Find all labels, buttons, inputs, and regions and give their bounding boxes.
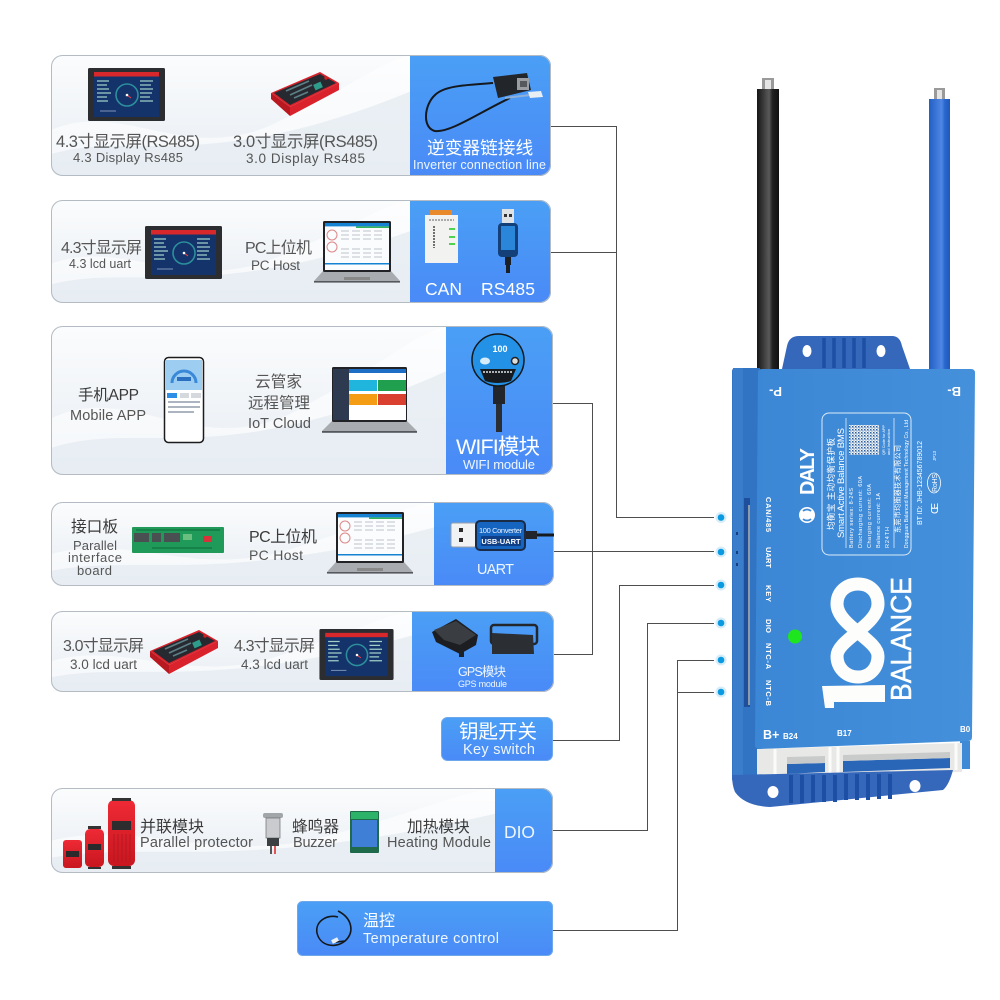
DIO label: DIO [504, 822, 535, 842]
GPS module label: GPS module [458, 679, 507, 689]
heating module label: 加热模块 [407, 818, 470, 836]
PC host label: PC上位机 [245, 239, 312, 257]
terminal labels: B17 [837, 729, 852, 738]
icon: WIFI module: 100 [492, 344, 508, 354]
product label: Dongguan Balanced Management Technology Co., Ltd [904, 420, 910, 548]
product label: QR Code for APP [882, 425, 886, 455]
4.3 inch display label: 4.3寸显示屏(RS485) [56, 132, 200, 151]
port labels: KEY [764, 585, 773, 602]
icon: 4.3 inch display [145, 226, 222, 279]
product label: Balance current: 1A [876, 493, 882, 548]
GPS module label: GPS模块 [458, 665, 506, 679]
mobile app label: 手机APP [78, 386, 139, 404]
4.3 lcd label [61, 239, 142, 271]
port labels: NTC-A [764, 643, 773, 670]
icon: heating module [350, 811, 379, 853]
icon: laptop [314, 221, 400, 283]
connectors [757, 741, 970, 777]
cloud label: 远程管理 [248, 394, 310, 412]
port labels: UART [764, 547, 773, 568]
icon: USB-UART dongle: USB-UART [481, 537, 521, 546]
connection dots [716, 512, 726, 698]
icon: USB-UART dongle [451, 520, 554, 551]
panel: GPS module [51, 611, 554, 692]
icon: 4.3 inch display [88, 68, 165, 121]
cloud label: 云管家 [255, 373, 302, 391]
terminal labels: B- [947, 384, 961, 399]
black wire P- [757, 78, 779, 370]
product label: 东莞市均衡器技术有限公司 [893, 445, 902, 533]
GPS module label [458, 665, 507, 689]
WIFI module label [456, 435, 540, 472]
buzzer label [292, 818, 339, 851]
port labels: CAN/485 [764, 497, 773, 532]
port labels [764, 497, 773, 707]
panel: WIFI module [51, 326, 553, 475]
3.0 inch display label [233, 132, 378, 166]
4.3 lcd label: 4.3 lcd uart [241, 657, 308, 672]
4.3 lcd label [234, 637, 315, 672]
mobile app label [70, 386, 146, 424]
terminal labels: B24 [783, 732, 798, 741]
BT ID and certifications [917, 441, 941, 525]
3.0 lcd label [63, 637, 144, 672]
icon: 4.3 inch display [319, 629, 394, 680]
terminal labels: B+ [763, 728, 779, 742]
panel: key switch: 钥匙开关 [459, 721, 537, 743]
BT ID and certifications: RoHS [932, 474, 939, 492]
panel: key switch [442, 718, 552, 760]
icon: 3.0 inch display [271, 72, 339, 116]
inverter cable label: 逆变器链接线 [427, 138, 533, 158]
blue wire B- [929, 88, 950, 370]
parallel protector label: 并联模块 [140, 818, 204, 836]
parallel protector label: Parallel protector [140, 835, 253, 851]
terminal labels: P- [769, 384, 782, 399]
product label: and Instruction [887, 429, 891, 455]
panel: CAN and RS485 [51, 200, 551, 303]
buzzer label: 蜂鸣器 [292, 818, 339, 836]
BT ID and certifications: CE [930, 503, 941, 514]
WIFI module label: WIFI module [463, 457, 535, 472]
3.0 inch display label: 3.0寸显示屏(RS485) [233, 132, 378, 151]
product label: Discharging current: 60A [858, 476, 864, 548]
icon: parallel interface board [132, 527, 224, 553]
4.3 lcd label: 4.3 lcd uart [69, 257, 132, 271]
parallel interface board label: interface [68, 550, 122, 565]
4.3 lcd label: 4.3寸显示屏 [234, 637, 315, 655]
mobile app label: Mobile APP [70, 408, 146, 424]
cloud label: IoT Cloud [248, 416, 311, 432]
top mounting flange [782, 336, 910, 369]
panel: inverter connection line and RS485 displays [51, 55, 551, 176]
icon: buzzer [263, 813, 283, 854]
icon: inverter cable [426, 73, 543, 131]
4.3 inch display label [56, 132, 200, 165]
panel: DIO [51, 788, 553, 873]
product label: Charging current: 60A [867, 484, 873, 548]
icon: laptop [327, 512, 413, 574]
buzzer label: Buzzer [293, 835, 337, 851]
parallel interface board label: 接口板 [71, 518, 118, 536]
heating module label: Heating Module [387, 835, 491, 851]
parallel protector label [140, 818, 253, 851]
PC host label [249, 528, 317, 563]
icon: CAN module [425, 210, 458, 263]
heating module label [387, 818, 491, 851]
DALY logo [797, 447, 819, 523]
BMS device [732, 78, 975, 807]
icon: USB-UART dongle: 100 Converter [479, 526, 522, 535]
status LED [788, 630, 802, 644]
BT ID and certifications: JP13 [932, 451, 937, 461]
3.0 lcd label: 3.0 lcd uart [70, 657, 137, 672]
side of enclosure [732, 368, 760, 780]
bottom mounting flange [732, 770, 953, 807]
product label: R24TH [885, 527, 891, 548]
icon: RS485 USB cable [498, 209, 518, 273]
panel: key switch: Key switch [463, 742, 535, 758]
panel: temperature control: Temperature control [363, 931, 499, 947]
front face [755, 369, 975, 749]
cloud label [248, 373, 311, 432]
PC host label: PC Host [251, 258, 300, 273]
4.3 lcd label: 4.3寸显示屏 [61, 239, 142, 257]
product label: Smart Active Balance BMS [836, 428, 847, 538]
CAN label: CAN [425, 279, 462, 299]
icon: cloud laptop [322, 367, 417, 433]
panel: temperature control: 温控 [363, 912, 395, 930]
icon: 3.0 inch display [150, 630, 218, 674]
port labels: DIO [764, 619, 773, 633]
100 BALANCE logo: BALANCE [886, 577, 918, 701]
icon: temperature sensor [317, 911, 351, 945]
RS485 label: RS485 [481, 279, 535, 299]
parallel interface board label: Parallel [73, 538, 117, 553]
BT ID and certifications: BT ID: JHB-123456789012 [917, 441, 924, 525]
PC host label [245, 239, 312, 273]
icon: WIFI module [472, 334, 524, 432]
inverter cable label [413, 138, 546, 172]
terminal labels [763, 384, 971, 742]
3.0 lcd label: 3.0寸显示屏 [63, 637, 144, 655]
100 BALANCE logo [822, 577, 918, 708]
port labels: NTC-B [764, 680, 773, 707]
panel: UART [51, 502, 554, 586]
panel: temperature control [298, 902, 552, 956]
PC host label: PC Host [249, 547, 303, 563]
product label [822, 413, 911, 555]
product label: 均衡宝 主动均衡保护板 [826, 438, 836, 530]
PC host label: PC上位机 [249, 528, 317, 546]
product label: Battery series: 8-24S [849, 488, 855, 548]
QR code [849, 425, 879, 455]
icon: phone [164, 358, 204, 442]
parallel interface board label [68, 518, 122, 578]
icon: GPS modules [432, 619, 537, 657]
terminal labels: B0 [960, 725, 971, 734]
DALY logo: DALY [797, 447, 819, 495]
icon: parallel protectors [63, 798, 135, 869]
3.0 inch display label: 3.0 Display Rs485 [246, 151, 365, 166]
WIFI module label: WIFI模块 [456, 435, 540, 459]
UART label: UART [477, 562, 514, 578]
parallel interface board label: board [77, 563, 112, 578]
inverter cable label: Inverter connection line [413, 158, 546, 172]
4.3 inch display label: 4.3 Display Rs485 [73, 150, 183, 165]
connector lines [551, 126, 714, 930]
